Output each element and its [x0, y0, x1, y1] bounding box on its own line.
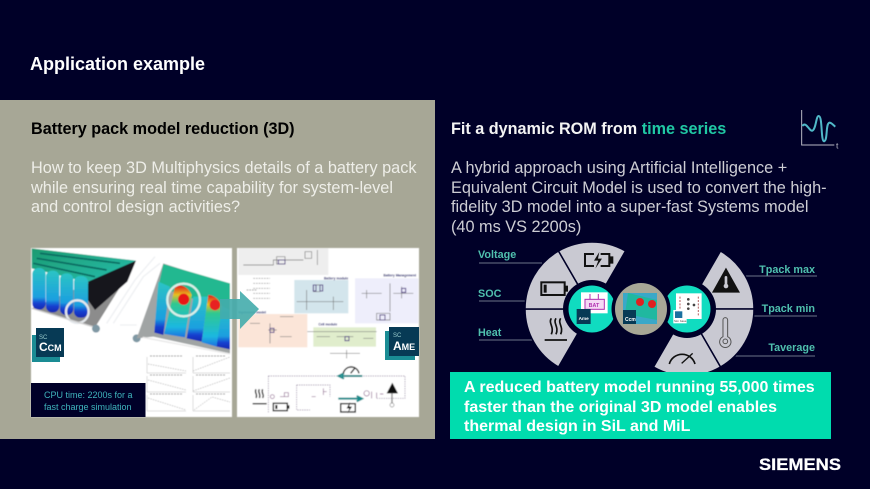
- left body text: and control design activities?: [31, 198, 240, 216]
- image: system schematic: Battery module: [324, 276, 348, 280]
- right body text: (40 ms VS 2200s): [451, 218, 581, 236]
- labels and leader lines: outputs: [733, 264, 817, 356]
- logo: SC AME: SC: [393, 333, 402, 339]
- left body text: [31, 159, 417, 216]
- logo: SC CCM: [32, 328, 64, 362]
- center circle: Ccm: [625, 317, 636, 323]
- right body text: Equivalent Circuit Model is used to convert the high-: [451, 179, 827, 197]
- mini system model: [673, 293, 702, 323]
- right body text: A hybrid approach using Artificial Intelligence +: [451, 159, 787, 177]
- callout text: A reduced battery model running 55,000 times: [464, 379, 815, 396]
- mini BAT model: BAT: [589, 303, 600, 309]
- right heading: Fit a dynamic ROM from time series: [451, 120, 726, 138]
- sector: tpack max: [687, 251, 754, 309]
- icon: battery: [541, 282, 568, 295]
- sector: tpack min: [687, 309, 754, 367]
- icon: gauge: [669, 353, 695, 364]
- icon: heat: [545, 318, 567, 340]
- right body text: fidelity 3D model into a super-fast Systems model: [451, 198, 808, 216]
- callout text: [464, 379, 815, 435]
- icons on fans: [541, 252, 740, 364]
- left body text: How to keep 3D Multiphysics details of a battery pack: [31, 159, 417, 177]
- diagram: left input fan: [525, 242, 626, 367]
- mini BAT model: [581, 292, 608, 313]
- image: 3D battery pack simulation: [31, 248, 232, 417]
- image: system schematic: [237, 248, 419, 417]
- labels and leader lines: outputs: Tpack max: [759, 264, 815, 276]
- image: system schematic: Battery Management: [383, 274, 417, 278]
- callout: CPU time: [31, 383, 146, 417]
- icon: time series chart: [802, 110, 839, 151]
- sector: SOC: [525, 251, 592, 309]
- arrow: teal CCM to AME: [220, 291, 259, 329]
- labels and leader lines: inputs: SOC: [478, 288, 502, 300]
- right body text: [451, 159, 827, 236]
- right teal circle: [664, 286, 710, 332]
- diagram: right output fan: [654, 251, 754, 376]
- image: system schematic: Equivalent model: [238, 310, 266, 314]
- mini system model: Sim base: [674, 319, 687, 323]
- logo: SC AME: AME: [393, 339, 415, 353]
- sector: heat: [525, 309, 592, 367]
- title: Application example: [30, 54, 205, 74]
- center circle: [612, 280, 670, 338]
- sector: voltage: [558, 242, 626, 309]
- left teal circle: [568, 286, 616, 332]
- left hub: [563, 280, 621, 338]
- image: system schematic: Cell module: [318, 323, 337, 327]
- mini AME badge: Ame: [579, 316, 589, 321]
- icon: warning thermometer: [712, 268, 740, 293]
- mini AME badge: [577, 309, 591, 324]
- labels and leader lines: outputs: Taverage: [768, 342, 815, 354]
- logo: SC CCM: SC: [39, 335, 48, 341]
- callout: CPU time: CPU time: 2200s for a: [44, 390, 133, 400]
- callout text: faster than the original 3D model enables: [464, 398, 777, 416]
- logo: SC AME: [385, 327, 419, 360]
- icon: time series chart: t: [836, 141, 839, 151]
- callout text: thermal design in SiL and MiL: [464, 418, 690, 435]
- icon: thermometer: [720, 318, 731, 347]
- SIEMENS logo: SIEMENS: [759, 456, 841, 474]
- sector: taverage: [654, 309, 720, 376]
- left heading: Battery pack model reduction (3D): [31, 120, 295, 138]
- panel: battery pack model reduction: [0, 100, 435, 439]
- callout: key result: [450, 372, 831, 439]
- charts: simulation result plots: [147, 356, 230, 411]
- logo: SC CCM: CCM: [39, 340, 62, 354]
- right hub: [658, 280, 716, 338]
- labels and leader lines: outputs: Tpack min: [762, 303, 815, 315]
- labels and leader lines: inputs: Voltage: [478, 249, 516, 261]
- icon: charging battery: [585, 252, 612, 269]
- left body text: while ensuring real time capability for system-level: [31, 179, 393, 197]
- labels and leader lines: inputs: Heat: [478, 327, 502, 339]
- labels and leader lines: inputs: [478, 249, 542, 340]
- callout: CPU time: fast charge simulation: [44, 402, 132, 412]
